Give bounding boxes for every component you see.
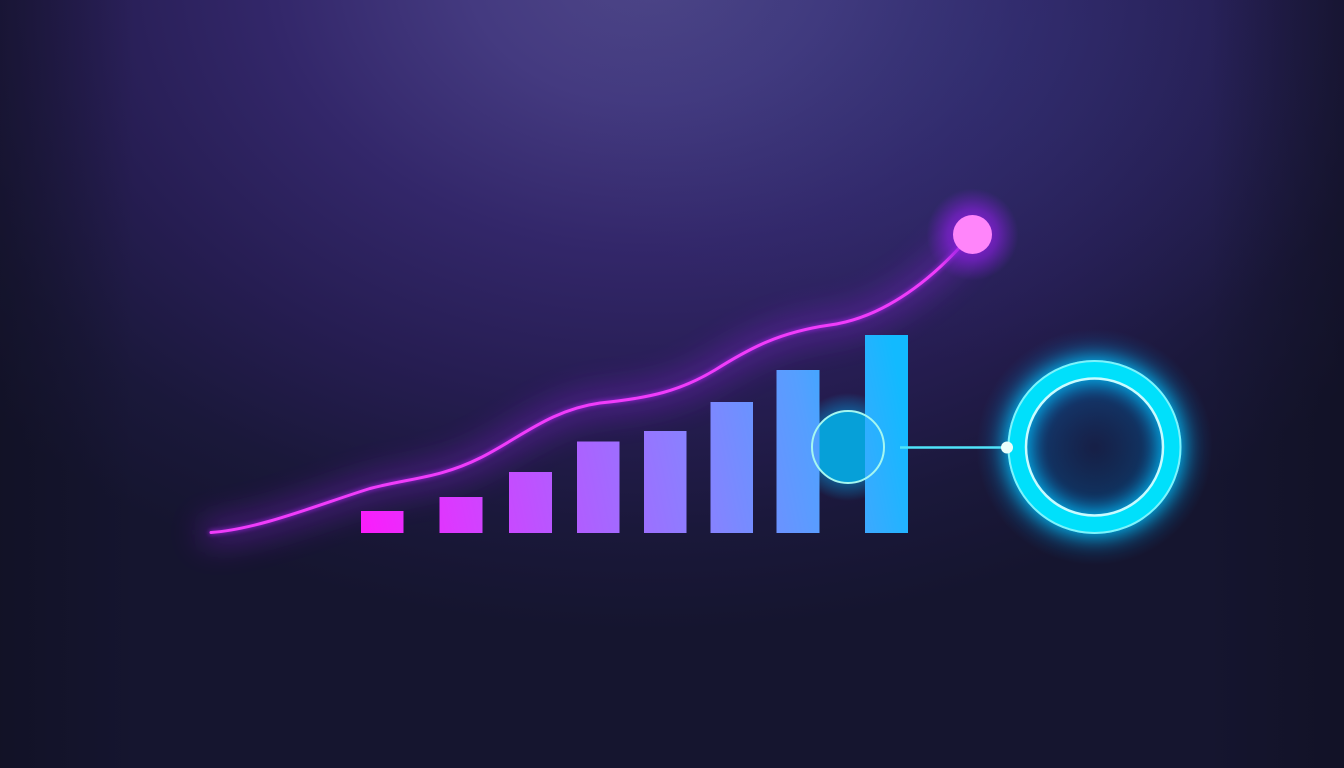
highlight circle [811, 395, 885, 499]
bar 8 [865, 335, 908, 533]
bar 2 [440, 497, 482, 533]
target ring [976, 329, 1212, 565]
bar 6 [710, 402, 753, 533]
connector line [900, 445, 1005, 450]
bar 5 [644, 431, 686, 533]
bar 7 [776, 370, 820, 533]
trend line [211, 247, 960, 532]
bar 4 [577, 442, 620, 533]
infographic canvas [0, 0, 1344, 594]
bar 1 [361, 511, 404, 533]
end point marker [926, 188, 1018, 280]
bar chart [361, 335, 908, 533]
bar 3 [509, 472, 552, 533]
connector dot [1001, 442, 1013, 454]
